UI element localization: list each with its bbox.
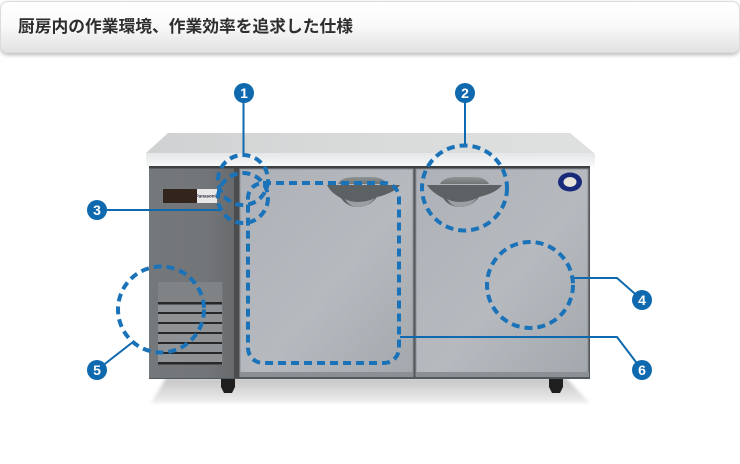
certification badge xyxy=(558,172,582,192)
highlight 5 xyxy=(118,266,204,352)
highlight 6 xyxy=(248,183,399,363)
marker 4 xyxy=(632,290,652,310)
highlight 2 xyxy=(422,146,507,230)
marker 3 xyxy=(87,200,107,220)
marker 5 xyxy=(87,360,107,380)
left door xyxy=(240,169,413,376)
marker 5: 5 xyxy=(93,362,101,378)
leader lines xyxy=(97,93,642,370)
marker 4: 4 xyxy=(638,292,646,308)
number markers xyxy=(87,83,652,380)
dashed highlight areas xyxy=(118,146,573,363)
counter unit xyxy=(146,133,595,393)
floor shadow xyxy=(151,378,590,403)
handle: left door xyxy=(327,177,400,207)
body backing xyxy=(149,165,590,379)
marker 2 xyxy=(455,83,475,103)
marker 1: 1 xyxy=(240,85,248,101)
panel: title bar xyxy=(0,1,740,53)
marker 6 xyxy=(632,360,652,380)
nameplate: Panasonic xyxy=(196,194,219,198)
feet xyxy=(221,378,563,393)
marker 6: 6 xyxy=(638,362,646,378)
right door xyxy=(416,169,588,376)
title: 厨房内の作業環境、作業効率を追求した仕様 xyxy=(18,17,353,36)
countertop xyxy=(146,133,594,153)
vent grille xyxy=(157,282,223,365)
highlight 3 xyxy=(218,173,268,223)
marker 1 xyxy=(234,83,254,103)
handle: right door xyxy=(427,177,502,207)
nameplate xyxy=(163,189,219,203)
machine compartment xyxy=(149,167,234,378)
highlight 1 xyxy=(218,155,268,205)
marker 3: 3 xyxy=(93,202,101,218)
marker 2: 2 xyxy=(461,85,469,101)
highlight 4 xyxy=(487,242,573,328)
